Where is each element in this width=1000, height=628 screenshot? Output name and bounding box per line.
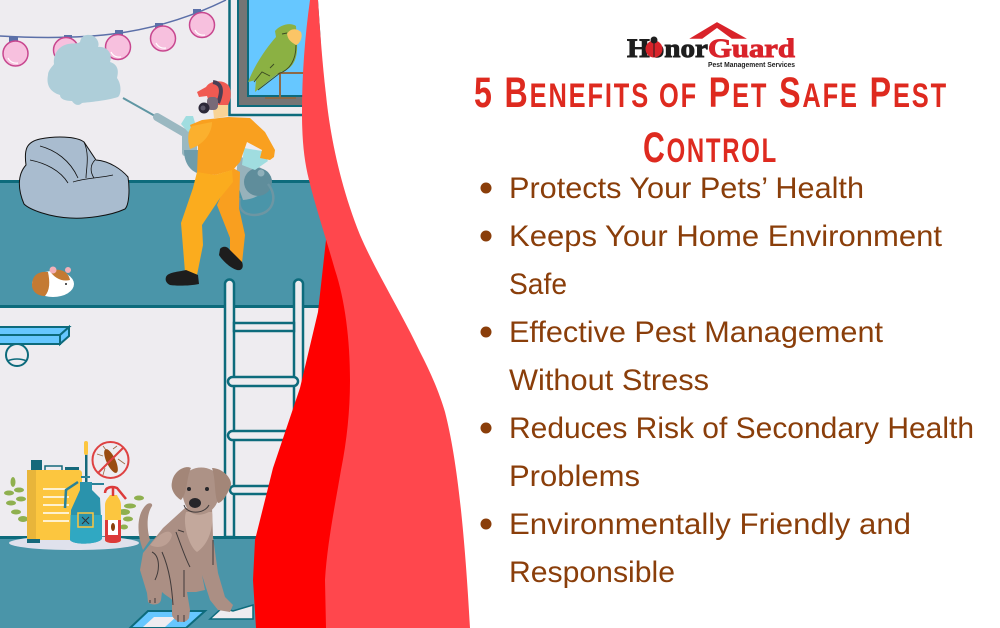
head <box>182 468 220 515</box>
shoulder highlight <box>188 122 212 149</box>
title <box>474 69 948 172</box>
bullet 2: Safe <box>509 268 567 301</box>
bullet 5: Environmentally Friendly and <box>509 508 911 541</box>
insecticide bottle <box>105 487 126 543</box>
wall shelf <box>0 327 69 366</box>
spray cloud <box>48 35 120 105</box>
pest control worker <box>123 81 275 286</box>
red curtain: front layer <box>302 0 470 628</box>
roof <box>692 23 744 38</box>
floor papers <box>130 605 253 628</box>
parrot on perch <box>248 24 306 98</box>
bullet 5 <box>480 508 911 589</box>
no-bug sign <box>92 442 128 478</box>
bullet 2 <box>480 220 943 301</box>
yellow jug <box>27 460 82 543</box>
string lights <box>0 0 226 66</box>
bullet 5: Responsible <box>509 556 675 589</box>
lower floor <box>0 536 300 628</box>
dog <box>138 467 233 622</box>
left ear <box>172 467 191 500</box>
wordmark accent: Guard <box>708 34 796 63</box>
ladybug <box>646 36 662 58</box>
bullet 4 <box>480 412 974 493</box>
title: CONTROL <box>643 124 778 172</box>
body and legs <box>140 507 233 622</box>
red curtain: back layer <box>253 240 360 628</box>
panel: illustrated room scene <box>0 0 340 628</box>
benefits list <box>480 172 974 589</box>
window with parrot <box>230 0 320 115</box>
bean bag <box>19 137 129 218</box>
title: 5 BENEFITS OF PET SAFE PEST <box>474 69 948 117</box>
wordmark: Honor <box>627 34 708 63</box>
bullet 3: Without Stress <box>509 364 709 397</box>
head and respirator <box>197 81 231 118</box>
shadow <box>9 536 139 550</box>
bullet 3: Effective Pest Management <box>509 316 884 349</box>
pest control products <box>4 441 144 550</box>
ink lines <box>150 505 213 622</box>
nose and eyes <box>187 487 209 508</box>
room wall <box>0 0 340 628</box>
chest highlight <box>185 512 212 552</box>
ladder <box>225 280 303 537</box>
white text panel <box>318 0 1000 628</box>
bullet 2: Keeps Your Home Environment <box>509 220 943 253</box>
guinea pig <box>32 266 74 297</box>
sprayer wand <box>123 98 197 156</box>
back tank <box>184 150 273 215</box>
logo: HonorGuard <box>627 23 796 69</box>
bullet 4: Problems <box>509 460 640 493</box>
upper floor <box>0 180 335 308</box>
right ear <box>212 468 231 503</box>
torso and arm <box>190 117 275 175</box>
bullet 3 <box>480 316 884 397</box>
boots <box>166 247 243 286</box>
pump sprayer <box>65 441 104 544</box>
bullet 1: Protects Your Pets’ Health <box>509 172 864 205</box>
plants <box>4 477 144 530</box>
tagline: Pest Management Services <box>708 62 795 69</box>
bullet 4: Reduces Risk of Secondary Health <box>509 412 974 445</box>
front leg <box>181 170 233 275</box>
gloves <box>181 116 268 170</box>
tail <box>138 503 152 550</box>
back leg <box>217 168 245 263</box>
